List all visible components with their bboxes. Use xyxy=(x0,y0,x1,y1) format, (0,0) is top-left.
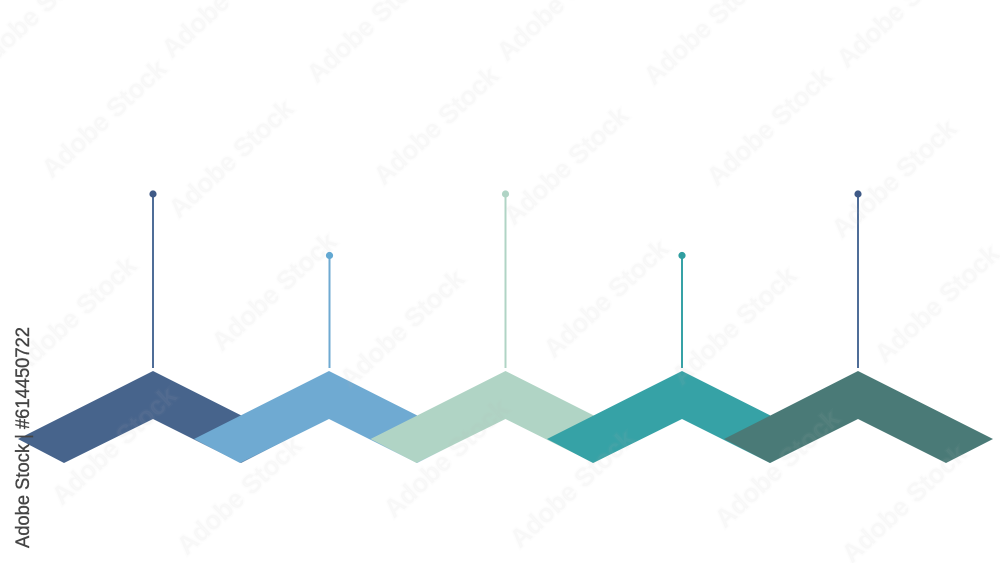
background watermarks: Adobe Stock xyxy=(701,61,838,192)
vertical stock id caption: Adobe Stock | #614450722 xyxy=(12,327,34,548)
background watermarks: Adobe Stock xyxy=(504,423,641,554)
background watermarks: Adobe Stock xyxy=(6,250,143,381)
step 4: teal chevron with pin xyxy=(547,252,817,463)
background watermarks: Adobe Stock xyxy=(36,53,173,184)
background watermarks: Adobe Stock xyxy=(334,263,471,394)
background watermarks: Adobe Stock xyxy=(666,260,803,391)
background watermarks: Adobe Stock xyxy=(538,233,675,364)
background watermarks: Adobe Stock xyxy=(826,113,963,244)
background watermarks: Adobe Stock xyxy=(206,226,343,357)
background watermarks: Adobe Stock xyxy=(171,430,308,561)
step 2: light blue chevron with pin xyxy=(194,252,464,463)
background watermarks: Adobe Stock xyxy=(368,60,505,191)
step 1: dark blue chevron with pin xyxy=(18,190,288,463)
step 5: dark green chevron with pin xyxy=(724,190,993,463)
background watermarks: Adobe Stock xyxy=(498,100,635,231)
step 3: mint chevron with pin xyxy=(370,190,640,463)
background watermarks: Adobe Stock xyxy=(709,403,846,534)
background watermarks: Adobe Stock xyxy=(163,93,300,224)
background watermarks: Adobe Stock xyxy=(46,380,183,511)
background watermarks: Adobe Stock xyxy=(378,393,515,524)
